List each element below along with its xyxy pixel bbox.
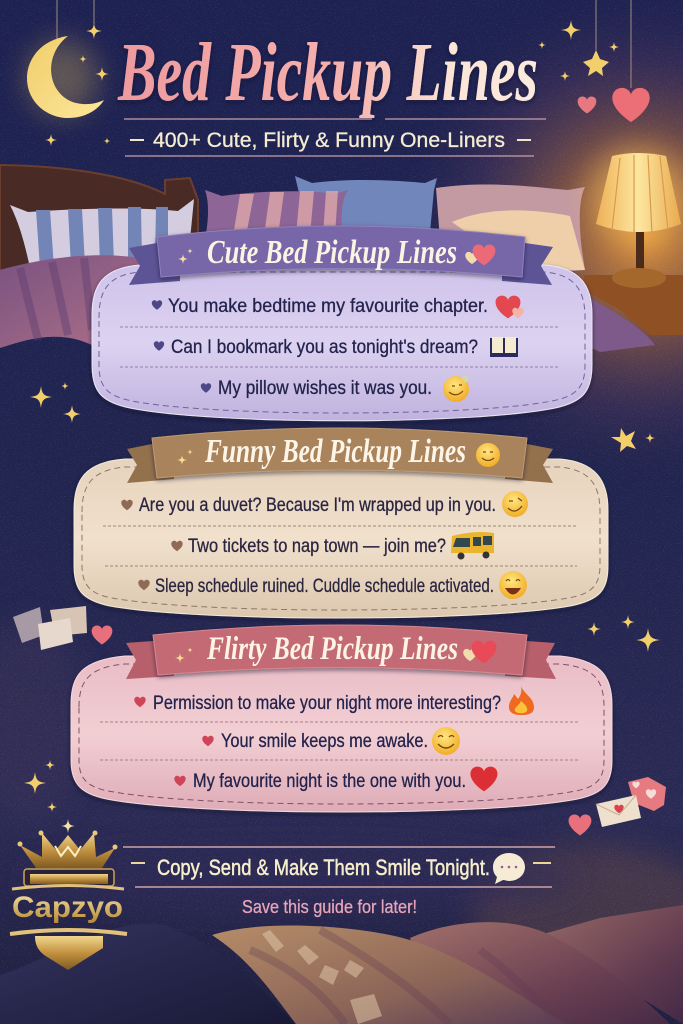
blanket left — [0, 255, 140, 348]
pillow: cream pink — [436, 185, 585, 272]
ribbon: cute — [129, 226, 553, 285]
line 2: Two tickets to nap town — join me? — [188, 535, 446, 557]
wordmark: Capzyo — [12, 891, 123, 924]
subtitle — [124, 119, 546, 156]
line 3 — [138, 571, 527, 599]
crown — [12, 819, 124, 889]
line 3: My favourite night is the one with you. — [193, 770, 466, 792]
logo — [10, 819, 127, 970]
icon: hearts — [463, 641, 496, 663]
icon: sparkles — [178, 248, 193, 264]
icon: smile — [476, 443, 500, 467]
heading: cute: Cute Bed Pickup Lines — [207, 234, 457, 271]
stars right — [538, 20, 619, 81]
line 1 — [134, 686, 534, 715]
line 3: My pillow wishes it was you. — [218, 377, 432, 399]
panel: flirty — [71, 625, 612, 812]
stars mid right — [587, 428, 660, 652]
icon: speech bubble — [493, 853, 525, 884]
ribbon: funny — [127, 428, 553, 483]
subtitle: 400+ Cute, Flirty & Funny One-Liners — [153, 129, 505, 152]
pillow: striped left — [10, 199, 194, 268]
line 1: You make bedtime my favourite chapter. — [168, 295, 488, 317]
stars left — [45, 23, 110, 146]
icon: love notes — [569, 777, 666, 835]
pillows — [10, 176, 585, 272]
nightstand — [584, 275, 683, 335]
panel: funny — [74, 428, 608, 618]
hanging strings — [57, 0, 631, 88]
shield — [10, 930, 127, 970]
pillow: mauve stripe — [205, 190, 348, 240]
icon: folded notes — [13, 606, 87, 650]
line 3: Sleep schedule ruined. Cuddle schedule activated. — [155, 575, 494, 597]
icon: crescent moon — [26, 36, 104, 118]
heading: flirty: Flirty Bed Pickup Lines — [206, 631, 458, 667]
line 1: Are you a duvet? Because I'm wrapped up in you. — [139, 494, 496, 516]
blanket right — [585, 295, 655, 352]
line 2: Your smile keeps me awake. — [221, 730, 428, 752]
footer call to action — [123, 847, 555, 887]
ribbon: flirty — [126, 625, 556, 679]
icon: pink heart — [92, 626, 112, 644]
save note: Save this guide for later! — [242, 897, 417, 917]
lamp — [590, 147, 683, 288]
pillow: cream inner — [452, 210, 585, 270]
panel: cute — [92, 226, 592, 421]
stars left side — [24, 382, 81, 812]
line 2: Can I bookmark you as tonight's dream? — [171, 336, 478, 358]
icon: hanging hearts — [578, 88, 650, 122]
blanket bottom — [0, 905, 683, 1024]
line 1: Permission to make your night more interesting? — [153, 692, 501, 714]
pillow: blue — [295, 176, 437, 240]
heading: funny: Funny Bed Pickup Lines — [204, 433, 466, 470]
icon: hearts — [465, 245, 495, 265]
bed headboard — [0, 165, 198, 270]
footer call to action: Copy, Send & Make Them Smile Tonight. — [157, 855, 490, 880]
icon: sparkles — [175, 647, 193, 663]
icon: sparkles — [177, 449, 193, 465]
